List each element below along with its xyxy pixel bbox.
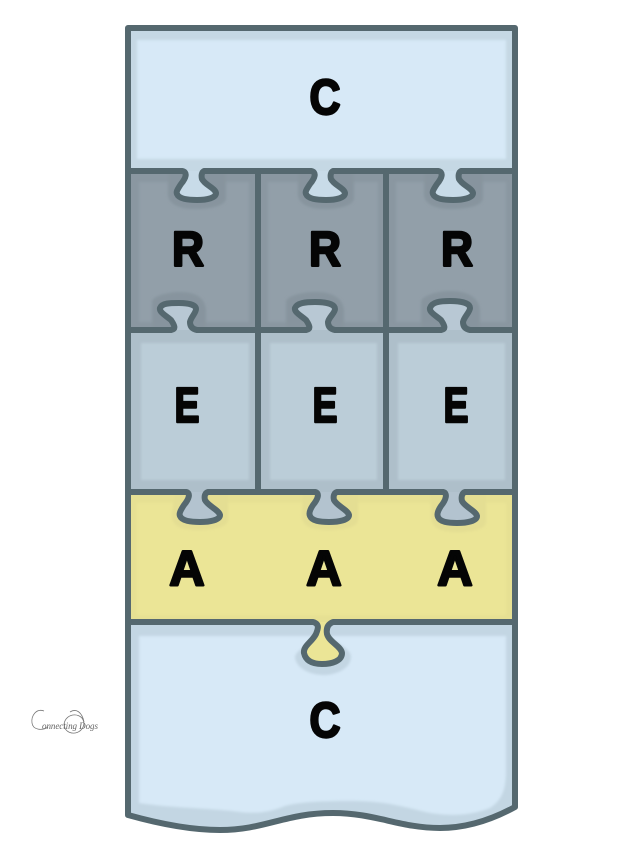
- letters: E row: E: [174, 379, 200, 433]
- letters: R row: [172, 223, 473, 277]
- heading letter: bottom C: C: [310, 694, 340, 748]
- letters: E row: E: [444, 379, 468, 433]
- heading letter: top C: C: [310, 71, 340, 125]
- letters: E row: [174, 379, 468, 433]
- signature: onnecting Dogs: [42, 721, 98, 731]
- panel: bottom C piece: [128, 622, 515, 830]
- letters: R row: R: [172, 223, 204, 277]
- letters: A row: A: [169, 542, 205, 596]
- letters: A row: A: [437, 542, 473, 596]
- panel: R row pieces: [128, 171, 515, 330]
- signature: [32, 710, 98, 736]
- letters: A row: [169, 542, 473, 596]
- panel: E row pieces: [128, 301, 515, 523]
- panel: A tab into bottom C: [304, 622, 342, 664]
- panel: top C piece: [128, 28, 515, 200]
- letters: E row: E: [312, 379, 338, 433]
- letters: R row: R: [309, 223, 341, 277]
- panel: A row piece: [128, 492, 515, 622]
- letters: R row: R: [441, 223, 473, 277]
- letters: A row: A: [306, 542, 342, 596]
- puzzle outlines: [128, 28, 515, 830]
